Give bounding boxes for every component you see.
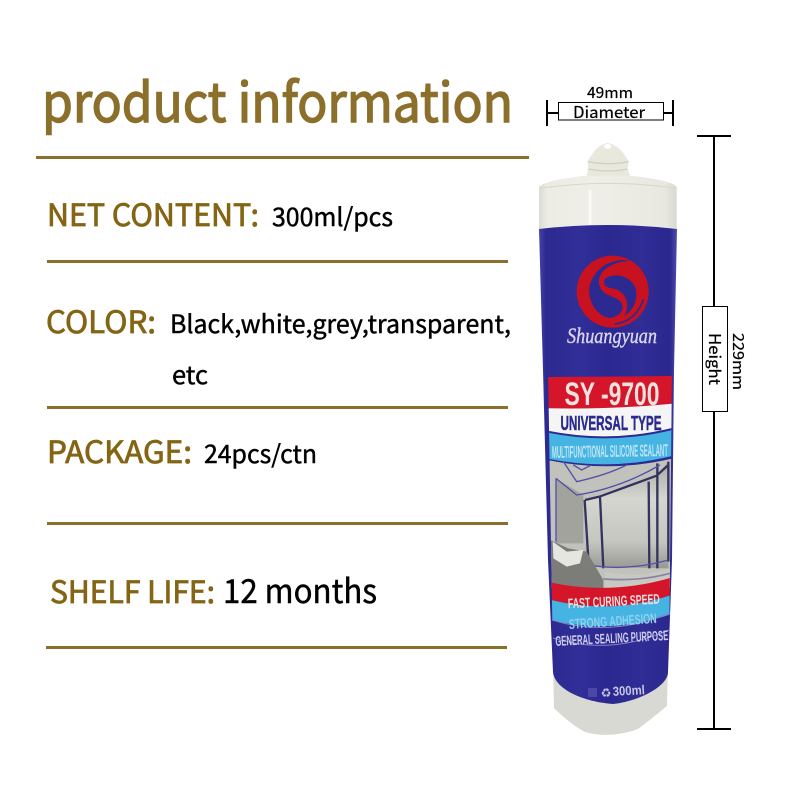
title: product information xyxy=(42,59,513,138)
label: SY-9700: SY -9700 xyxy=(564,376,660,412)
label: red band xyxy=(548,376,672,408)
dimension: height: 229mm xyxy=(728,333,749,390)
tube bottom white end xyxy=(553,668,668,735)
dimension: diameter: 49mm xyxy=(587,82,633,103)
dimension: height xyxy=(697,135,749,730)
title rule xyxy=(36,156,529,159)
row: color xyxy=(46,297,511,392)
label: general sealing purpose: GENERAL SEALING PURPOSE xyxy=(555,627,669,649)
row: color: etc xyxy=(172,356,208,392)
tube nozzle and collar xyxy=(539,143,677,234)
row: shelf life xyxy=(50,565,377,613)
icon: bin mark xyxy=(588,688,597,697)
label: universal type: UNIVERSAL TYPE xyxy=(560,413,662,435)
label: white band xyxy=(548,404,672,436)
tube blue body xyxy=(539,225,677,704)
label: purple strip outline xyxy=(552,613,670,645)
row: net content: NET CONTENT: xyxy=(47,190,259,235)
row: net content xyxy=(47,190,393,235)
label: red strip xyxy=(552,578,670,606)
row: package: PACKAGE: xyxy=(47,427,192,472)
label: cyan strip xyxy=(552,596,670,626)
dimension: diameter: Diameter xyxy=(573,99,646,123)
label: strong adhesion: STRONG ADHESION xyxy=(568,610,657,632)
product: sealant tube xyxy=(539,143,680,735)
row: color: COLOR: xyxy=(46,297,156,342)
icon: recycle: ♻ xyxy=(601,686,611,700)
dimension: diameter xyxy=(546,82,674,126)
label: fast curing speed: FAST CURING SPEED xyxy=(567,591,660,611)
row: shelf life: SHELF LIFE: xyxy=(50,567,215,612)
row: package: 24pcs/ctn xyxy=(204,435,317,471)
logo: swirl xyxy=(577,256,649,328)
label: cyan band xyxy=(549,428,672,464)
label: 300ml mark: 300ml xyxy=(612,682,645,699)
dimension: height: Height xyxy=(704,333,728,385)
row: package xyxy=(47,427,317,472)
row: net content: 300ml/pcs xyxy=(272,198,393,234)
logo wordmark: Shuangyuan xyxy=(567,323,657,348)
row: color: Black,white,grey,transparent, xyxy=(170,305,511,341)
row: shelf life: 12 months xyxy=(223,565,377,613)
label: window photo xyxy=(550,458,672,588)
